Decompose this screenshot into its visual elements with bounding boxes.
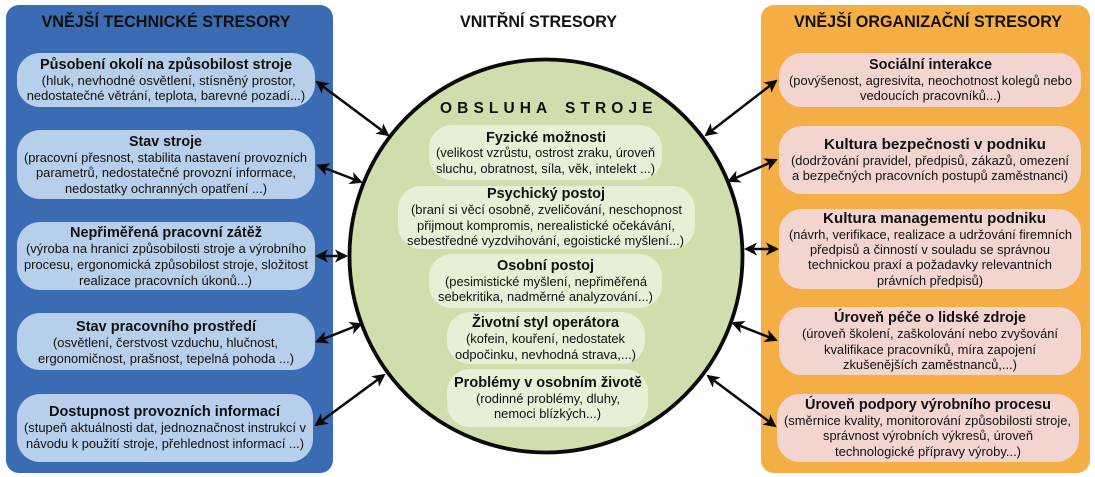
- card: work environment condition: (osvětlení, čerstvost vzduchu, hlučnost,: [53, 335, 278, 350]
- card: management culture: předpisů a činností v souladu se správnou: [810, 242, 1050, 257]
- card: work environment condition: Stav pracovního prostředí: [76, 319, 257, 335]
- card: personal life problems: [447, 369, 648, 427]
- card: production process support: Úroveň podpory výrobního procesu: [805, 395, 1051, 413]
- panel: external technical stressors: [6, 5, 333, 473]
- card: safety culture: Kultura bezpečnosti v podniku: [824, 137, 1046, 153]
- card: safety culture: [779, 126, 1081, 194]
- arrows: right side connections: [706, 81, 777, 426]
- card: personal attitude: [429, 254, 662, 308]
- card: availability of operating information: [17, 394, 313, 462]
- card: personal life problems: nemoci blízkých...): [494, 406, 601, 421]
- card: safety culture: (dodržování pravidel, předpisů, zákazů, omezení: [791, 153, 1069, 168]
- card: human resources care: Úroveň péče o lidské zdroje: [834, 308, 1026, 326]
- card: physical abilities: (velikost vzrůstu, ostrost zraku, úroveň: [436, 145, 655, 160]
- card: physical abilities: Fyzické možnosti: [486, 130, 606, 146]
- card: machine condition: Stav stroje: [129, 134, 202, 150]
- card: production process support: [777, 394, 1079, 462]
- card: personal attitude: Osobní postoj: [497, 258, 594, 274]
- card: personal life problems: Problémy v osobním životě: [454, 375, 642, 391]
- card: operator lifestyle: Životní styl operátora: [472, 313, 620, 331]
- card: environment influence: [17, 53, 315, 107]
- card: production process support: správnost výrobních výkresů, úroveň: [823, 428, 1033, 443]
- card: machine condition: (pracovní přesnost, stabilita nastavení provozních: [24, 150, 307, 165]
- card: psychological attitude: (braní si věcí osobně, zveličování, neschopnost: [411, 202, 682, 217]
- card: psychological attitude: sebestředné vyzdvihování, egoistické myšlení...): [407, 233, 684, 248]
- card: machine condition: parametrů, nedostatečné provozní informace,: [36, 165, 296, 180]
- card: social interaction: (povýšenost, agresivita, neochotnost kolegů nebo: [789, 73, 1072, 88]
- card: environment influence: (hluk, nevhodné osvětlení, stísněný prostor,: [42, 73, 296, 88]
- card: operator lifestyle: [447, 312, 645, 364]
- card: human resources care: (úroveň školení, zaškolování nebo zvyšování: [802, 326, 1058, 341]
- card: management culture: technickou praxí a požadavky relevantních: [808, 257, 1052, 272]
- card: environment influence: Působení okolí na způsobilost stroje: [40, 57, 292, 73]
- card: human resources care: zkušenějších zaměstnanců,...): [843, 357, 1017, 372]
- card: machine condition: nedostatky ochranných opatření ...): [65, 181, 267, 196]
- heading: machine operator: OBSLUHA: [440, 100, 552, 117]
- card: machine condition: [17, 130, 315, 199]
- card: work environment condition: ergonomičnost, prašnost, tepelná pohoda ...): [38, 351, 294, 366]
- card: human resources care: kvalifikace pracovníků, míra zapojení: [824, 342, 1036, 357]
- card: production process support: technologické přípravy výroby...): [835, 444, 1021, 459]
- card: physical abilities: sluchu, obratnost, síla, věk, intelekt ...): [436, 161, 655, 176]
- card: personal life problems: (rodinné problémy, dluhy,: [476, 391, 620, 406]
- card: personal attitude: (pesimistické myšlení, nepřiměřená: [445, 274, 648, 289]
- card: management culture: Kultura managementu podniku: [823, 211, 1046, 227]
- card: management culture: právních předpisů): [877, 273, 983, 288]
- card: psychological attitude: přijmout kompromis, nerealistické očekávání,: [417, 218, 675, 233]
- card: excessive workload: [17, 222, 315, 290]
- heading: internal stressors: VNITŘNÍ STRESORY: [460, 12, 617, 31]
- heading: external technical stressors: VNĚJŠÍ TECHNICKÉ STRESORY: [42, 12, 290, 31]
- card: management culture: [779, 209, 1081, 289]
- heading: external organizational stressors: VNĚJŠÍ ORGANIZAČNÍ STRESORY: [794, 12, 1062, 31]
- heading: machine operator: STROJE: [565, 100, 658, 117]
- arrows: left side connections: [316, 82, 388, 425]
- card: availability of operating information: Dostupnost provozních informací: [49, 404, 281, 420]
- card: work environment condition: [17, 313, 315, 370]
- card: safety culture: a bezpečných pracovních postupů zaměstnanci): [792, 168, 1068, 183]
- card: environment influence: nedostatečné větrání, teplota, barevné pozadí...): [27, 88, 305, 103]
- card: social interaction: Sociální interakce: [869, 57, 992, 73]
- card: operator lifestyle: (kofein, kouření, nedostatek: [466, 331, 625, 346]
- card: availability of operating information: (stupeň aktuálnosti dat, jednoznačnost instrukcí v: [24, 420, 306, 435]
- card: personal attitude: sebekritika, nadměrné analyzování...): [438, 289, 653, 304]
- card: physical abilities: [429, 125, 662, 180]
- card: management culture: (návrh, verifikace, realizace a udržování firemních: [789, 227, 1072, 242]
- card: social interaction: vedoucích pracovníků...): [860, 88, 1001, 103]
- card: excessive workload: realizace pracovních úkonů...): [79, 273, 252, 288]
- card: excessive workload: Nepřiměřená pracovní zátěž: [70, 225, 262, 241]
- card: psychological attitude: [398, 186, 695, 249]
- card: excessive workload: (výroba na hranici způsobilosti stroje a výrobního: [26, 241, 306, 256]
- card: psychological attitude: Psychický postoj: [487, 186, 605, 202]
- panel: external organizational stressors: [761, 5, 1090, 473]
- card: social interaction: [779, 53, 1081, 107]
- card: availability of operating information: návodu k použití stroje, přehlednost informací ...): [26, 436, 304, 451]
- card: operator lifestyle: odpočinku, nevhodná strava,...): [455, 347, 636, 362]
- card: production process support: (směrnice kvality, monitorování způsobilosti stroje,: [784, 413, 1071, 428]
- card: excessive workload: procesu, ergonomická způsobilost stroje, složitost: [24, 257, 308, 272]
- card: human resources care: [779, 307, 1081, 375]
- panel: machine operator circle: [350, 60, 742, 452]
